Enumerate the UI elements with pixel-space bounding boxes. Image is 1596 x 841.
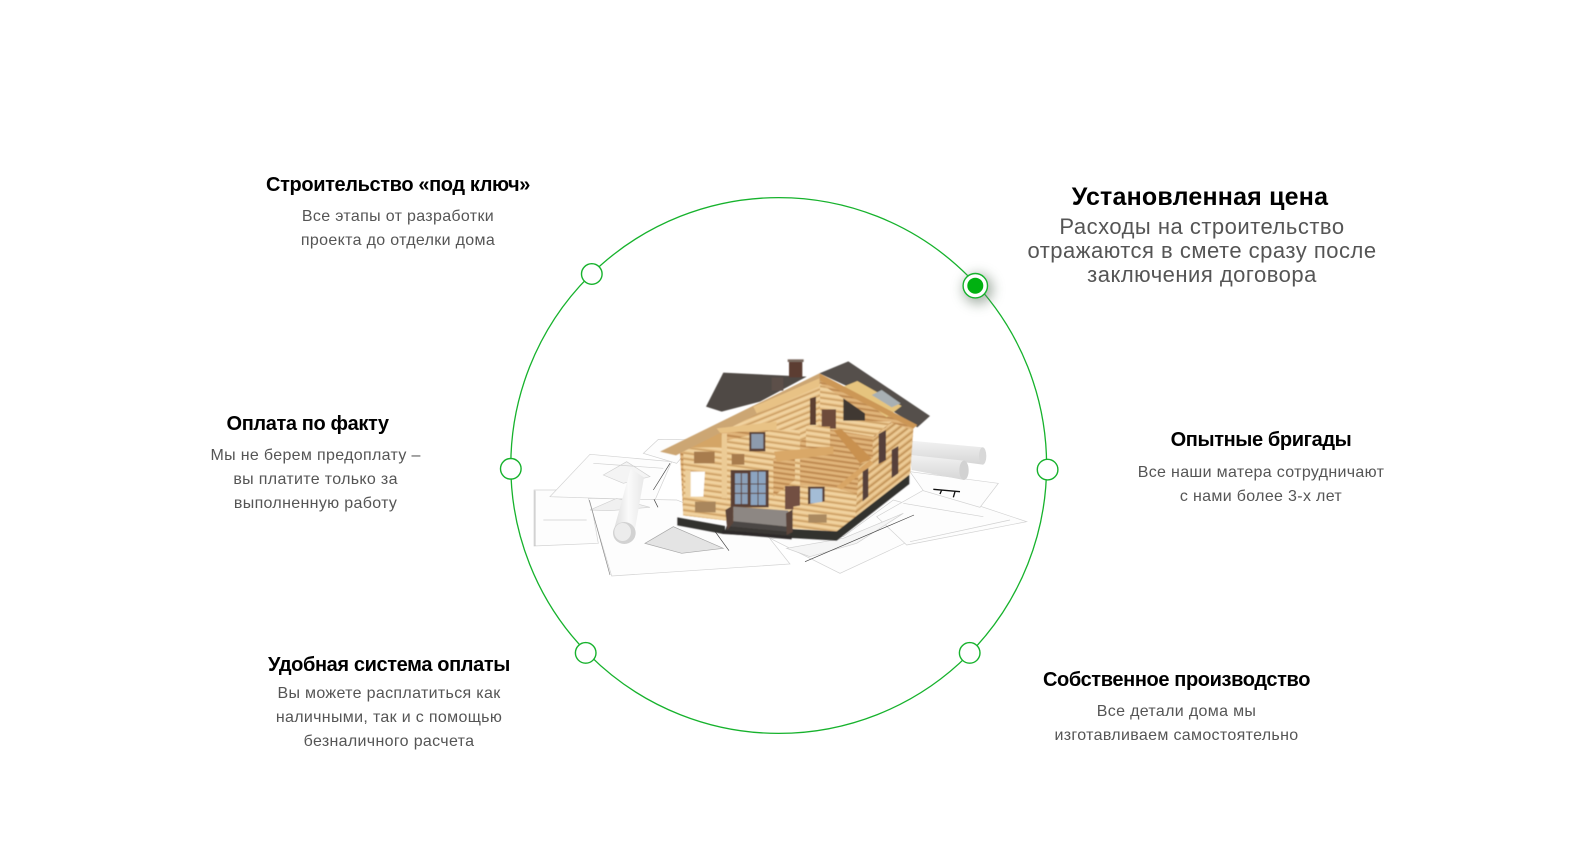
illustration: blueprint sheets [534, 439, 1027, 576]
text block: fixed price (active): Установленная цена [1072, 182, 1328, 210]
front lower wall [683, 430, 860, 531]
house silhouette base [680, 380, 913, 531]
text block: experienced crews: Все наши матера сотрудничают [1138, 464, 1384, 481]
text block: own production: изготавливаем самостоятельно [1054, 727, 1298, 744]
text block: convenient payment: Удобная система оплаты [268, 654, 510, 676]
marker: active fixed price [963, 274, 993, 304]
text block: turnkey construction: проекта до отделки дома [301, 232, 495, 249]
upper gable wall [720, 380, 820, 457]
marker: payment system [575, 643, 596, 663]
text block: convenient payment: наличными, так и с помощью [276, 709, 502, 726]
marker: experienced crews [1037, 459, 1058, 480]
text block: own production: Собственное производство [1043, 669, 1310, 691]
text block: turnkey construction: Строительство «под ключ» [266, 174, 530, 196]
roof edge beams [660, 373, 824, 455]
text block: convenient payment [268, 654, 510, 750]
front terrace [793, 497, 855, 531]
text block: turnkey construction [266, 174, 530, 249]
illustration: paper rolls [613, 441, 986, 544]
windows [731, 430, 898, 509]
interior lower rooms [773, 450, 795, 497]
text block: fixed price (active): отражаются в смете сразу после [1027, 238, 1377, 262]
text block: turnkey construction: Все этапы от разработки [302, 208, 494, 225]
roof cutaway insulation [842, 381, 902, 417]
text block: own production: Все детали дома мы [1097, 703, 1256, 720]
marker: own production [959, 643, 980, 663]
green ring [511, 198, 1047, 733]
upper room back wall [820, 383, 892, 437]
text block: experienced crews [1138, 429, 1384, 505]
text block: pay on completion: выполненную работу [234, 495, 397, 512]
text block: pay on completion: вы платите только за [233, 471, 398, 488]
text block: experienced crews: Опытные бригады [1171, 429, 1351, 451]
text block: fixed price (active) [1027, 182, 1377, 286]
text block: convenient payment: Вы можете расплатиться как [277, 685, 501, 702]
right roof [819, 361, 930, 427]
text block: experienced crews: с нами более 3-х лет [1180, 488, 1342, 505]
text block: convenient payment: безналичного расчета [304, 733, 474, 750]
right side wall [873, 423, 913, 505]
text block: pay on completion [210, 413, 421, 512]
text block: own production [1043, 669, 1310, 744]
marker: construction turnkey [582, 264, 602, 284]
staircase [833, 429, 872, 463]
inner balcony and floor beams [806, 426, 830, 447]
back roof [706, 373, 807, 412]
stone foundation [677, 475, 909, 541]
marker: pay on completion [500, 458, 521, 479]
text block: pay on completion: Мы не берем предоплату – [210, 447, 421, 464]
text block: fixed price (active): заключения договора [1087, 262, 1317, 286]
text block: fixed price (active): Расходы на строительство [1059, 214, 1345, 238]
illustration: log house [660, 359, 930, 541]
text block: pay on completion: Оплата по факту [227, 413, 389, 435]
porch landing [733, 507, 788, 527]
chimney [788, 359, 804, 377]
left porch [683, 447, 747, 474]
entry stairs [722, 505, 793, 539]
